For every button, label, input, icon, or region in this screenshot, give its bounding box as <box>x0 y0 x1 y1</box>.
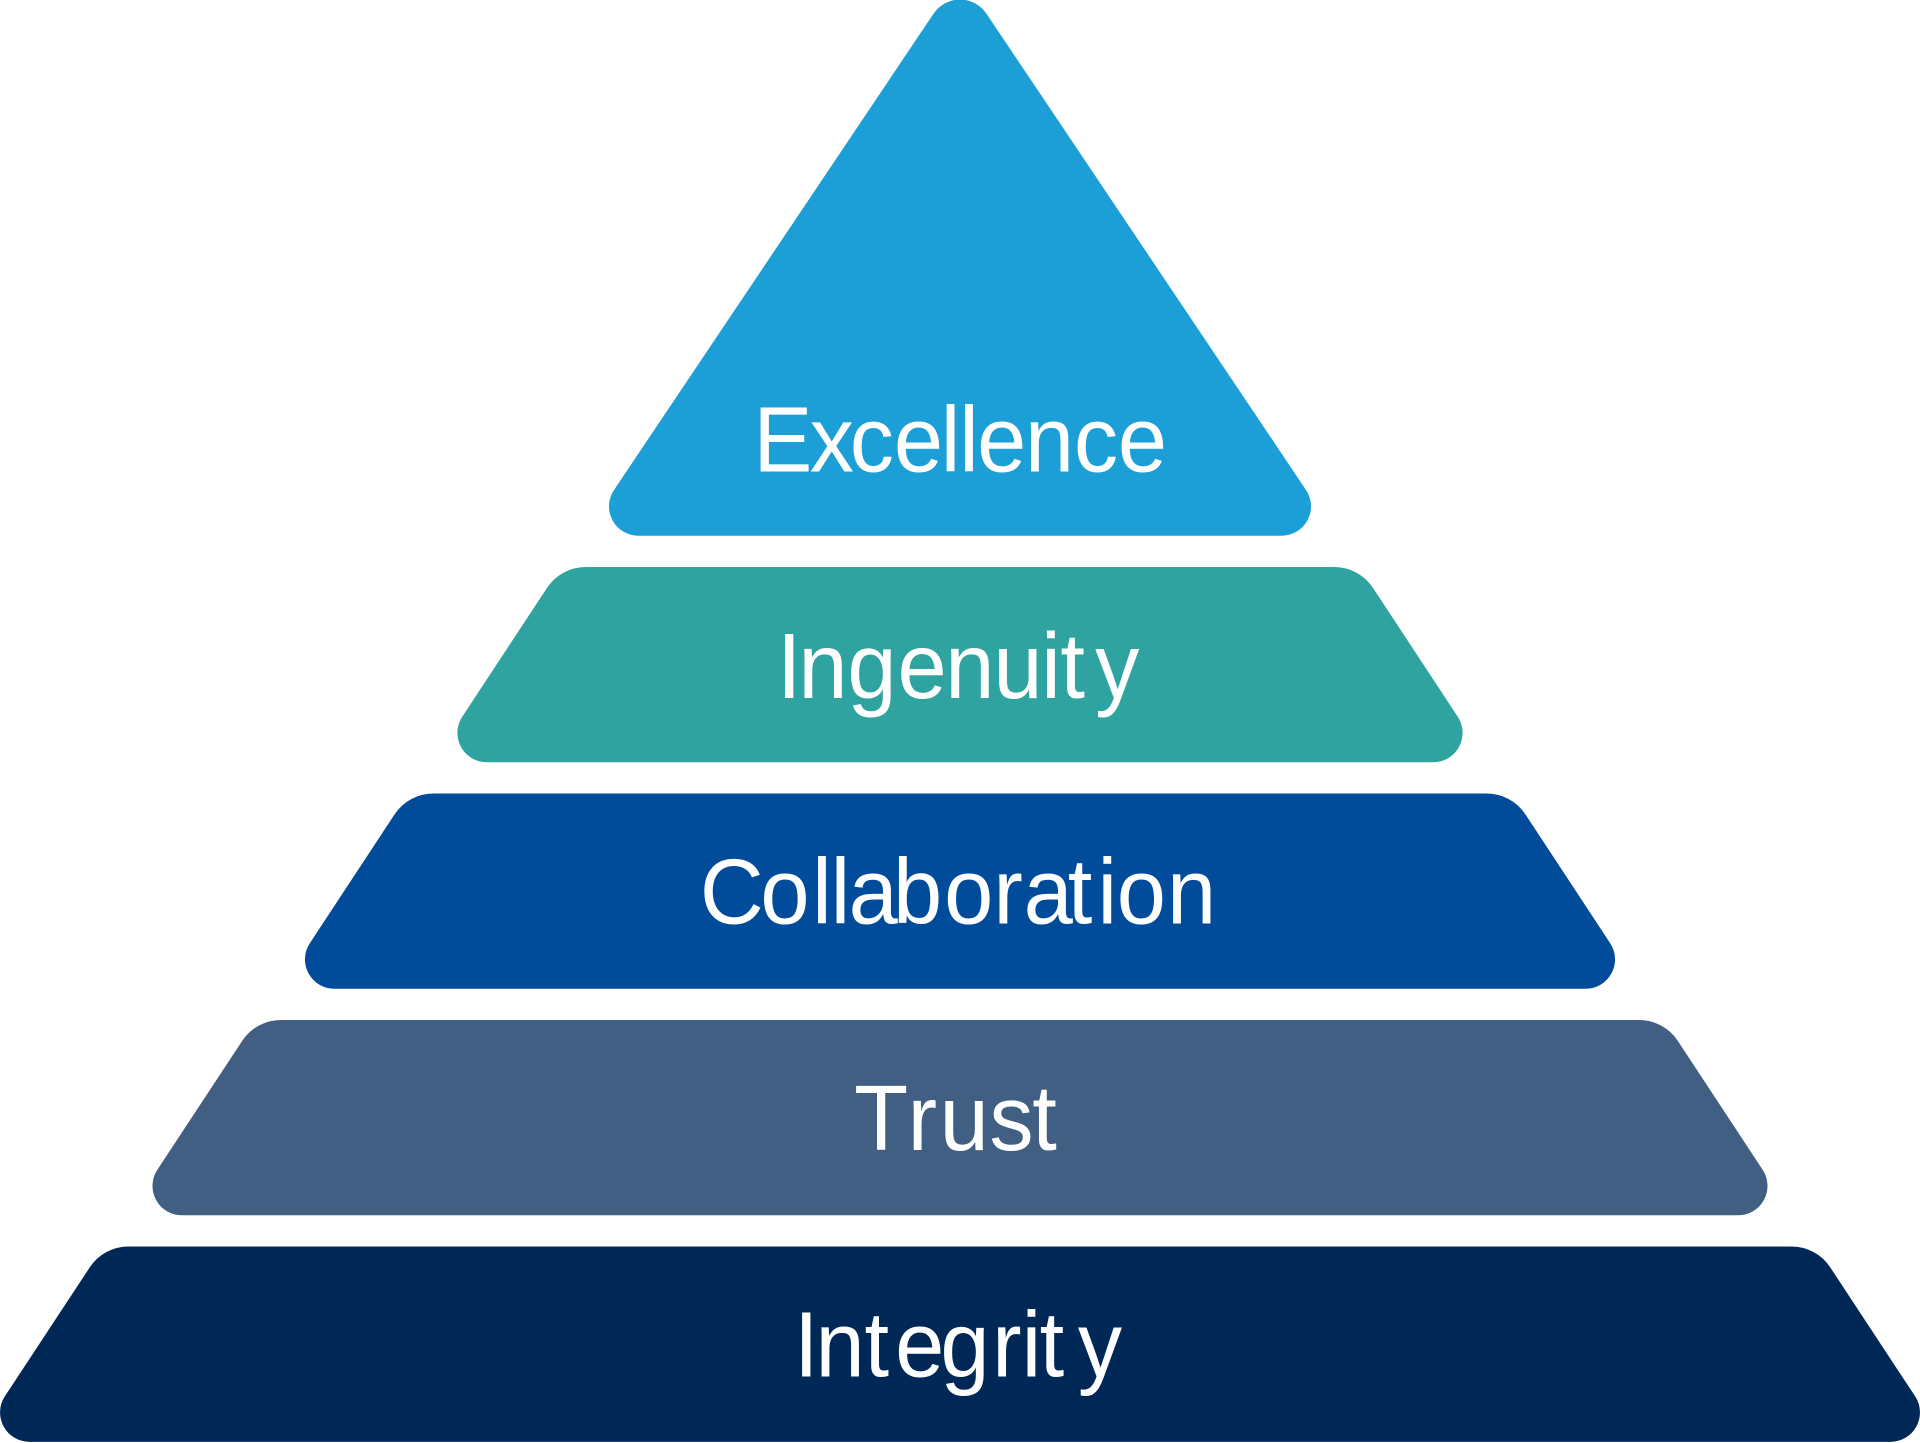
tier: Ingenuity <box>457 567 1463 762</box>
shape: trapezoid <box>153 1020 1767 1215</box>
tier: Integrity <box>0 1247 1920 1442</box>
shape: trapezoid <box>0 1247 1920 1442</box>
tier: Collaboration <box>305 793 1615 989</box>
label: Excellence: Excellence <box>753 388 1167 492</box>
tier: Trust <box>153 1020 1767 1215</box>
shape: top triangle <box>609 0 1311 536</box>
shape: trapezoid <box>457 567 1463 762</box>
label: Collaboration: Collaboration <box>700 840 1216 944</box>
tier: Excellence <box>609 0 1311 536</box>
label: Ingenuity: Ingenuity <box>777 615 1140 718</box>
shape: trapezoid <box>305 793 1615 989</box>
label: Integrity: Integrity <box>794 1293 1123 1397</box>
label: Trust: Trust <box>854 1067 1057 1170</box>
